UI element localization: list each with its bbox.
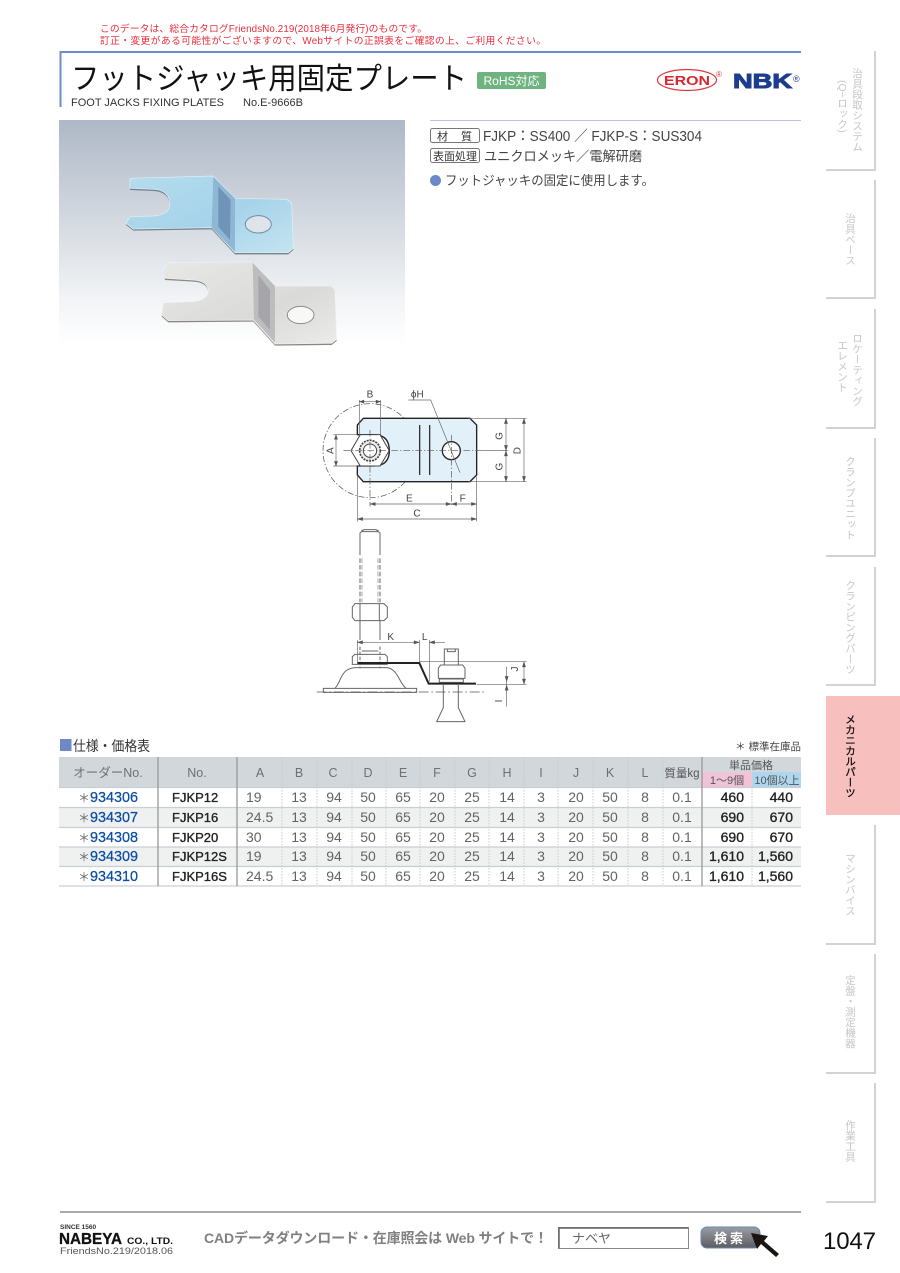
row 2: 25 [464,809,480,825]
row 2: 20 [568,809,584,825]
row 4: 14 [499,848,515,864]
row 5: 50 [360,868,376,884]
side tab: クランピングパーツ [826,567,875,685]
side tab: 定盤・測定機器: 定盤・測定機器 [844,975,856,1049]
table header: D [363,766,373,780]
drawing: side view: I [494,700,505,702]
search box: ナベヤ [572,1231,611,1246]
side tab: ロケーティングエレメント: ロケーティング [851,333,863,406]
row 1: 3 [537,789,545,805]
drawing: plate plan view: A [325,447,336,454]
row 3: FJKP20 [172,830,218,845]
footer rule [60,1211,801,1213]
footer company logo: SINCE 1560 [60,1224,97,1231]
row 4 [78,848,793,865]
row 1: ＊ [78,791,90,805]
row 1: 20 [568,789,584,805]
side tab: 治具ベース [826,180,875,298]
row 3: 934308 [90,830,138,846]
row 3: 3 [537,829,545,845]
side tab: ロケーティングエレメント: エレメント [836,340,848,392]
side tab: 治具段取システム: (Q−ロック) [836,80,848,133]
header frame [60,52,801,107]
row 4: 20 [429,848,445,864]
notice text [100,22,546,47]
row 5: 8 [641,868,649,884]
row 2: 14 [499,809,515,825]
title: フットジャッキ用固定プレート [71,63,467,96]
english subtitle: No.E-9666B [243,97,303,109]
table header: L [642,766,649,780]
row 1: 19 [246,789,262,805]
footer company logo [59,1224,173,1257]
table header: 1～9個 [710,774,744,787]
row 1: 50 [602,789,618,805]
drawing: plate plan view: G [495,432,506,440]
footer company logo: CO., LTD. [127,1236,173,1246]
row 3: 50 [602,829,618,845]
logo: ERON [658,70,722,90]
row 3: 670 [770,829,793,845]
row 5: ＊ [78,870,90,884]
row 3: 0.1 [672,829,692,845]
row 1: 94 [326,789,342,805]
row 5: 20 [429,868,445,884]
side tab: 治具段取システム [826,51,875,170]
row 5: 20 [568,868,584,884]
row 1: 460 [721,789,744,805]
row 5 [78,868,793,885]
side tab: 定盤・測定機器 [826,954,875,1073]
table header: C [328,766,338,780]
notice text: 訂正・変更がある可能性がございますので、Webサイトの正誤表をご確認の上、ご利用ください。 [100,34,546,47]
row 3 [78,829,793,846]
row 4: 13 [291,848,307,864]
rule above specs [430,120,801,121]
row 2 [78,809,793,826]
row 5: 50 [602,868,618,884]
side tab: 作業工具 [826,1083,875,1202]
table header [59,757,801,787]
row 5: FJKP16S [172,869,227,884]
notice text: このデータは、総合カタログFriendsNo.219(2018年6月発行)のものです。 [100,22,427,35]
side tab: クランピングパーツ: クランピングパーツ [844,580,856,674]
page number: 1047 [823,1228,876,1255]
spec: material: FJKP：SS400 ／ FJKP-S：SUS304 [483,128,702,145]
row 4: 94 [326,848,342,864]
badge: RoHS: RoHS対応 [483,74,540,88]
row 4: 1,560 [758,848,793,864]
row 3: 20 [429,829,445,845]
table header: 質量kg [664,766,700,780]
row 2: 0.1 [672,809,692,825]
table header: B [295,766,303,780]
row 4: 8 [641,848,649,864]
row 4: 3 [537,848,545,864]
row 5: 13 [291,868,307,884]
row 2: 690 [721,809,744,825]
row 4: FJKP12S [172,849,227,864]
table header: オーダーNo. [73,765,143,780]
row 3: 690 [721,829,744,845]
row 4: 1,610 [709,848,744,864]
row 4: 65 [395,848,411,864]
usage note: フットジャッキの固定に使用します。 [445,173,654,188]
row 2: 65 [395,809,411,825]
drawing: side view: K [387,632,394,643]
row 1 [78,789,793,806]
logo: ERON: ® [716,70,722,79]
row 1: 440 [770,789,793,805]
row 3: 50 [360,829,376,845]
logo: NBK: NBK [733,71,793,93]
drawing: side view [317,530,527,722]
row 2: 8 [641,809,649,825]
drawing: plate plan view: C [413,509,421,520]
row 4: 0.1 [672,848,692,864]
logo: NBK [733,71,800,93]
row 2: 13 [291,809,307,825]
icon: arrow cursor [751,1233,779,1257]
table header: G [467,766,477,780]
side tab: 治具ベース: 治具ベース [844,212,856,266]
side tab: マシンバイス: マシンバイス [844,853,856,916]
table header: E [399,766,407,780]
row 2: 24.5 [246,809,273,825]
logo: NBK: ® [793,74,800,84]
table header: 単品価格 [729,758,773,772]
table header: F [433,766,441,780]
spec: material: 質 [461,129,472,143]
row 2: 94 [326,809,342,825]
row 4: 25 [464,848,480,864]
row 4: 19 [246,848,262,864]
spec: material: 材 [437,129,448,143]
row 4: 20 [568,848,584,864]
side tab: 作業工具: 作業工具 [844,1120,856,1163]
row 5: 934310 [90,869,138,885]
row 5: 0.1 [672,868,692,884]
stock note: ＊ 標準在庫品 [735,740,801,753]
row 5: 3 [537,868,545,884]
badge: RoHS [477,72,546,89]
search button [701,1227,760,1248]
side tab: ロケーティングエレメント [826,309,875,428]
row 3: 20 [568,829,584,845]
drawing: plate plan view: B [367,389,374,400]
side tab: マシンバイス [826,825,875,944]
row 2: 934307 [90,810,138,826]
side tab active: メカニカルパーツ: メカニカルパーツ [844,714,856,798]
drawing: plate plan view: D [513,447,524,454]
drawing: plate plan view [323,389,527,522]
english subtitle [71,97,303,109]
row 2: 670 [770,809,793,825]
section heading: 仕様・価格表 [73,738,150,754]
row 3: ＊ [78,831,90,845]
row 3: 8 [641,829,649,845]
row 3: 65 [395,829,411,845]
row 5: 94 [326,868,342,884]
english subtitle: FOOT JACKS FIXING PLATES [71,97,224,109]
row 3: 25 [464,829,480,845]
row 5: 65 [395,868,411,884]
row 2: ＊ [78,811,90,825]
product photo [59,120,405,346]
row 3: 94 [326,829,342,845]
row 4: 934309 [90,849,138,865]
footer company logo: NABEYA [59,1231,122,1248]
row 5: 14 [499,868,515,884]
spec: surface treatment: 表面処理 [433,150,477,163]
row 1: 8 [641,789,649,805]
row 1: 934306 [90,790,138,806]
table header: No. [187,766,207,780]
row 1: 0.1 [672,789,692,805]
row 2: 3 [537,809,545,825]
row 5: 25 [464,868,480,884]
row 1: 20 [429,789,445,805]
drawing: plate plan view: G [495,463,506,471]
search button: 検索 [714,1231,746,1246]
table header: I [539,766,543,780]
row 2: FJKP16 [172,810,218,825]
row 1: 65 [395,789,411,805]
row 3: 13 [291,829,307,845]
row 5: 1,610 [709,868,744,884]
drawing: plate plan view: F [460,494,466,505]
row 5: 24.5 [246,868,273,884]
drawing: plate plan view: E [406,494,413,505]
table header: K [606,766,615,780]
table header: 10個以上 [754,774,800,787]
row stripes [59,807,801,827]
row 3: 30 [246,829,262,845]
search box [558,1228,688,1248]
side tab active: メカニカルパーツ [826,696,900,815]
row 4: ＊ [78,850,90,864]
table header: J [573,766,579,780]
side tab: 治具段取システム: 治具段取システム [851,67,863,152]
row 3: 14 [499,829,515,845]
row 2: 50 [602,809,618,825]
row 5: 1,560 [758,868,793,884]
logo: ERON: ERON [664,73,710,88]
row 1: FJKP12 [172,790,218,805]
drawing: side view: J [510,666,521,671]
spec and price table [59,757,801,886]
row 2: 20 [429,809,445,825]
side tab: クランプユニット [826,438,875,556]
row 1: 25 [464,789,480,805]
side tab: クランプユニット: クランプユニット [844,456,856,540]
row 1: 13 [291,789,307,805]
row 4: 50 [360,848,376,864]
footer company logo: FriendsNo.219/2018.06 [60,1246,173,1257]
row 1: 50 [360,789,376,805]
spec: surface treatment: ユニクロメッキ／電解研磨 [484,149,642,164]
row 2: 50 [360,809,376,825]
drawing: side view: L [422,632,428,643]
table header: H [502,766,512,780]
row 4: 50 [602,848,618,864]
row 1: 14 [499,789,515,805]
drawing: plate plan view: ϕH [411,390,424,401]
table header: A [256,766,265,780]
footer call to action: CADデータダウンロード・在庫照会は Web サイトで！ [204,1230,548,1246]
